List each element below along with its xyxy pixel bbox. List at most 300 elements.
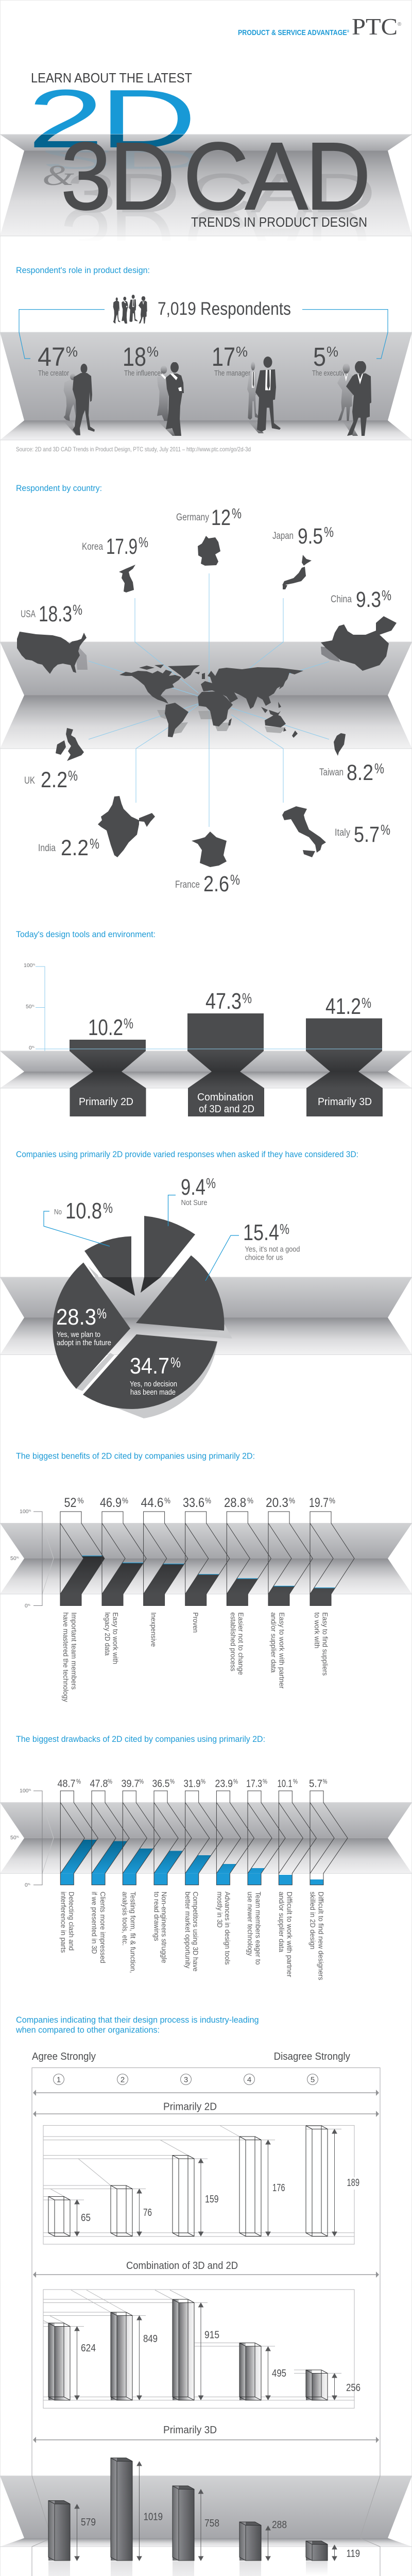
country: China: China xyxy=(331,594,352,605)
shaded bar 849 xyxy=(111,2312,158,2400)
stat: executive: 5 xyxy=(313,342,326,371)
title 3D CAD: D xyxy=(305,123,371,230)
chevron labels: if we presented in 3D xyxy=(91,1892,99,1954)
country: China xyxy=(321,587,397,671)
chevron values: % xyxy=(205,1497,211,1505)
country: Germany: % xyxy=(232,505,242,521)
chevron labels: Easy to work with xyxy=(111,1613,119,1664)
stat: creator xyxy=(38,342,78,378)
title 3D CAD: D xyxy=(110,123,175,230)
chevron values: % xyxy=(329,1497,335,1505)
chevron values: 31.9 xyxy=(183,1777,201,1789)
axis: 100 xyxy=(20,1788,29,1794)
solid bar 579 xyxy=(48,2501,96,2561)
heading: Companies using primarily 2D provide varied responses when asked if they have considered 3D: xyxy=(16,1149,358,1159)
chevron labels: analysis tools, etc. xyxy=(121,1892,129,1946)
chevron labels: and/or supplier data xyxy=(278,1892,286,1952)
country: India: % xyxy=(90,836,99,852)
chevron outlines xyxy=(60,1512,354,1605)
scale numbers: 2 xyxy=(121,2075,125,2084)
logo: PTC header: PTC xyxy=(352,13,398,40)
country: Italy xyxy=(282,806,390,857)
chevron labels: Proven xyxy=(192,1613,200,1633)
stat: creator: 47 xyxy=(38,342,65,371)
chevron values: 44.6 xyxy=(141,1496,164,1510)
section: respondent role xyxy=(0,265,412,453)
axis: % xyxy=(29,1789,31,1792)
fold band xyxy=(0,1277,412,1354)
section: drawbacks of 2D xyxy=(0,1734,412,1980)
wire bar 65: 65 xyxy=(81,2212,91,2224)
country: Germany: Germany xyxy=(176,512,209,523)
pie slice: no decision xyxy=(83,1334,217,1409)
country: Germany xyxy=(176,505,242,566)
section: benefits of 2D xyxy=(0,1451,412,1702)
chevron labels: to read drawings xyxy=(152,1892,161,1941)
stat: executive xyxy=(312,342,348,378)
solid bar 288 xyxy=(239,2519,287,2561)
axis: 0 xyxy=(25,1603,28,1609)
outer frame xyxy=(32,2068,380,2576)
logo: PTC header: ® xyxy=(398,22,402,27)
figure: manager xyxy=(247,357,281,433)
wire bar 159 xyxy=(173,2156,218,2236)
bar: combination: Combination xyxy=(197,1092,253,1103)
label: not a good choice: choice for us xyxy=(245,1254,283,1262)
chevron values: % xyxy=(76,1777,81,1785)
chevron values: % xyxy=(263,1777,267,1785)
chevron values: % xyxy=(164,1497,170,1505)
fold band xyxy=(0,1803,412,1873)
section: design tools xyxy=(0,929,412,1116)
chevron values: % xyxy=(247,1497,253,1505)
chevron labels: mostly in 3D xyxy=(216,1892,224,1928)
panel: primarily 2D bars xyxy=(43,2125,359,2244)
scale ends: Disagree Strongly xyxy=(274,2051,350,2062)
stat: manager xyxy=(212,342,250,378)
wire bar 189: 189 xyxy=(347,2177,359,2189)
bar: combination: of 3D and 2D xyxy=(199,1104,254,1115)
chevron labels xyxy=(59,1892,325,1980)
pie shadows xyxy=(76,1266,232,1418)
scale numbers: 3 xyxy=(184,2075,188,2084)
label: not a good choice: 15.4 xyxy=(243,1220,279,1245)
wire bar 176 xyxy=(239,2137,285,2236)
pie slice: no decision: % xyxy=(170,1354,181,1370)
figure: creator xyxy=(63,364,95,435)
world map xyxy=(119,665,303,738)
label: no: 10.8 xyxy=(65,1198,102,1224)
chevron outlines xyxy=(60,1791,348,1885)
solid bar 758: 758 xyxy=(204,2518,219,2529)
chevron level lines xyxy=(82,1556,335,1588)
chevron fills xyxy=(60,1556,335,1605)
chevron labels xyxy=(62,1613,330,1702)
country: USA: 18.3 xyxy=(39,602,72,626)
figure: executive xyxy=(337,361,371,436)
chevron labels: Important team members xyxy=(70,1613,78,1690)
chevron labels: Easier not to change xyxy=(237,1613,245,1675)
shaded bar 256: 256 xyxy=(346,2382,360,2394)
chevron labels: Team members eager to xyxy=(254,1892,263,1965)
country: Korea: % xyxy=(139,534,148,550)
title 3D CAD xyxy=(61,123,371,230)
bar: primarily 2D xyxy=(70,1015,146,1116)
pie slice: not sure xyxy=(141,1216,195,1293)
reflection of 3D CAD: 3 xyxy=(61,189,111,295)
reflection of 3D CAD: D xyxy=(305,189,371,295)
chevron values: % xyxy=(293,1777,298,1785)
chevron values: 36.5 xyxy=(152,1777,170,1789)
bar: primarily 3D: % xyxy=(362,995,371,1011)
label: primarily 3D: Primarily 3D xyxy=(163,2425,217,2436)
pie slice: plan to adopt: adopt in the future xyxy=(57,1339,111,1347)
stat: creator: % xyxy=(66,344,78,360)
axis: 50 xyxy=(10,1835,16,1841)
chevron labels: use newer technology xyxy=(246,1892,254,1956)
ampersand: & xyxy=(42,160,75,192)
chevron labels: Inexpensive xyxy=(149,1613,158,1647)
chevron labels: Testing form, fit & function, xyxy=(129,1892,138,1973)
section: industry leading xyxy=(0,2015,412,2576)
country: France xyxy=(175,832,240,896)
stat: influencer: The influencer xyxy=(124,369,163,378)
chevron values: 5.7 xyxy=(309,1777,322,1789)
arrow: combination xyxy=(33,2272,379,2278)
country: UK: 2.2 xyxy=(41,768,67,792)
pie slice: no decision: has been made xyxy=(130,1388,176,1397)
section: considered 3D pie xyxy=(0,1149,412,1418)
title 2D on fold: 2 xyxy=(27,73,104,165)
chevron values: 10.1 xyxy=(277,1777,293,1789)
axis xyxy=(10,1509,54,1609)
title 2D: D xyxy=(99,73,197,165)
chevron labels: Competitors using 3D have xyxy=(192,1892,200,1972)
country: Japan: 9.5 xyxy=(298,524,323,549)
title 2D on fold xyxy=(34,134,184,147)
country: USA xyxy=(17,602,88,674)
country: USA: USA xyxy=(21,609,36,620)
solid bar 1019 xyxy=(111,2458,163,2561)
chevron labels: Advances in design tools xyxy=(224,1892,232,1965)
axis: % xyxy=(16,1836,19,1839)
chevron labels: established process xyxy=(229,1613,237,1671)
heading: Respondent by country: xyxy=(16,483,102,493)
pie slice: plan to adopt: 28.3 xyxy=(56,1304,96,1330)
country: Italy: Italy xyxy=(335,827,350,838)
fold band xyxy=(0,332,412,440)
title 2D on fold: D xyxy=(99,73,197,165)
solid bar 579: 579 xyxy=(81,2517,96,2528)
logo: PTC header: PRODUCT & SERVICE ADVANTAGE xyxy=(238,28,369,37)
chevron labels: and/or supplier data xyxy=(270,1613,278,1673)
fold band xyxy=(0,642,412,749)
axis: 50 xyxy=(10,1555,16,1562)
title 2D xyxy=(27,73,197,165)
chevron labels: legacy 2D data xyxy=(104,1613,112,1656)
stat: manager: % xyxy=(236,344,248,360)
shaded bar 624 xyxy=(48,2323,96,2400)
stat: influencer xyxy=(123,342,163,378)
label: not a good choice xyxy=(243,1220,300,1262)
chevron values: % xyxy=(201,1777,205,1785)
shadow of 3D CAD: D xyxy=(115,162,180,224)
chevron values: % xyxy=(108,1777,112,1785)
chevron labels: skilled in 2D design xyxy=(309,1892,317,1950)
chevron labels: better market opportunity xyxy=(184,1892,192,1969)
solid bar 1019: 1019 xyxy=(144,2511,163,2522)
chevron values: 33.6 xyxy=(183,1496,204,1510)
label: not a good choice: % xyxy=(280,1221,289,1237)
solid bar 758 xyxy=(173,2486,219,2561)
label: no: No xyxy=(54,1208,62,1216)
bar: primarily 3D: 41.2 xyxy=(325,994,361,1019)
wire bar 159: 159 xyxy=(205,2194,218,2205)
chevron values: % xyxy=(170,1777,175,1785)
reflection of 3D CAD: A xyxy=(245,189,308,295)
scale ends: Agree Strongly xyxy=(32,2051,96,2062)
source note: Source: 2D and 3D CAD Trends in Product Design, PTC study, July 2011 – http://www.ptc.com/go/2d-3d xyxy=(16,446,251,453)
pie slice: no decision: 34.7 xyxy=(130,1353,169,1379)
stat: manager: The manager xyxy=(214,369,250,378)
pie slice: plan to adopt: Yes, we plan to xyxy=(57,1331,100,1339)
panel: primarily 3D bars xyxy=(48,2458,360,2576)
reflection of 3D CAD: D xyxy=(110,189,175,295)
chevron labels: interference in parts xyxy=(59,1892,67,1953)
chevron values: % xyxy=(77,1497,83,1505)
bar: primarily 3D: Primarily 3D xyxy=(318,1096,372,1108)
chevron labels: Clients more impressed xyxy=(99,1892,107,1963)
wire bar 76 xyxy=(111,2185,152,2236)
country: Taiwan: Taiwan xyxy=(319,767,344,778)
axis: % xyxy=(28,1604,30,1607)
country: Italy: 5.7 xyxy=(354,822,380,847)
heading: Today's design tools and environment: xyxy=(16,929,156,939)
heading: Respondent's role in product design: xyxy=(16,265,150,275)
chevron values: 20.3 xyxy=(266,1496,288,1510)
bar: primarily 2D: Primarily 2D xyxy=(79,1096,133,1108)
chevron values: 47.8 xyxy=(90,1777,108,1789)
title 3D CAD: C xyxy=(183,123,249,230)
callout lines xyxy=(44,1195,239,1281)
chevron values: 48.7 xyxy=(58,1777,75,1789)
scale ends xyxy=(32,2051,350,2062)
chevron labels: to work with xyxy=(313,1613,321,1649)
heading: learn about the latest: LEARN ABOUT THE LATEST xyxy=(31,70,192,86)
fold band: title xyxy=(0,134,412,236)
respondent total: 7,019 Respondents xyxy=(158,299,291,319)
bracket xyxy=(19,310,388,359)
heading: when compared to other organizations: xyxy=(15,2025,160,2035)
country: France: France xyxy=(175,879,200,890)
chevron values: 23.9 xyxy=(215,1777,233,1789)
chevron fills xyxy=(60,1840,265,1873)
shadow of 3D CAD: D xyxy=(311,162,376,224)
scale numbers: 4 xyxy=(247,2075,251,2084)
country: Taiwan: 8.2 xyxy=(347,760,373,785)
label: no: % xyxy=(103,1200,113,1216)
world map floor shadow xyxy=(157,710,286,734)
solid bar 288: 288 xyxy=(272,2519,287,2531)
axis: % xyxy=(32,1005,35,1008)
country: Japan: % xyxy=(324,524,334,540)
country: France: % xyxy=(230,872,240,888)
chevron values: 28.8 xyxy=(224,1496,246,1510)
arrow: primarily 2D xyxy=(33,2111,379,2117)
connector lines xyxy=(89,573,329,827)
shadow of 3D CAD: A xyxy=(250,162,314,224)
bar: combination: % xyxy=(242,990,252,1006)
label: combination: Combination of 3D and 2D xyxy=(126,2260,238,2272)
axis: % xyxy=(33,963,36,967)
stat: influencer: % xyxy=(147,344,159,360)
chevron values: % xyxy=(289,1497,295,1505)
country: Taiwan: % xyxy=(374,760,384,776)
arrow: primarily 3D xyxy=(33,2437,379,2443)
pie slice: plan to adopt xyxy=(53,1262,130,1389)
shaded bar 495 xyxy=(239,2343,287,2400)
country: Italy: % xyxy=(381,822,390,838)
country: Japan: Japan xyxy=(272,531,294,541)
reflections xyxy=(48,2561,328,2576)
shadow of 3D CAD: 2 xyxy=(39,145,115,174)
fold band xyxy=(0,1523,412,1594)
section: respondent by country xyxy=(0,483,412,896)
axis: % xyxy=(28,1883,30,1886)
axis: 100 xyxy=(20,1509,29,1515)
stat: influencer: 18 xyxy=(123,342,146,371)
chevron values: 52 xyxy=(64,1496,76,1510)
country: Germany: 12 xyxy=(211,505,231,530)
stat: creator: The creator xyxy=(38,369,69,378)
country: India: 2.2 xyxy=(61,836,89,860)
label: not a good choice: Yes, it's not a good xyxy=(245,1246,300,1254)
label: not sure xyxy=(181,1175,216,1207)
shadow of 3D CAD: 3 xyxy=(66,162,116,224)
wire bar 176: 176 xyxy=(272,2182,285,2194)
shadow of 3D CAD: D xyxy=(111,145,208,174)
country: China: % xyxy=(382,587,391,603)
country: India xyxy=(38,796,155,860)
logo: PTC header xyxy=(238,13,402,40)
fold band xyxy=(0,2476,412,2547)
country: Korea: 17.9 xyxy=(106,534,138,559)
shaded bar 849: 849 xyxy=(143,2333,158,2345)
pie slice: not a good choice xyxy=(136,1256,224,1331)
solid bar 119: 119 xyxy=(346,2548,360,2560)
pie slice: no decision: Yes, no decision xyxy=(130,1380,177,1388)
axis: 0 xyxy=(25,1882,28,1888)
arrow: scale xyxy=(33,2090,379,2096)
panel: combination bars xyxy=(43,2290,360,2408)
chevron values: % xyxy=(322,1777,328,1785)
country: China: 9.3 xyxy=(356,587,381,612)
country: Japan xyxy=(272,524,334,589)
chevron labels: Detecting clash and xyxy=(67,1892,76,1951)
reflection of 3D CAD: C xyxy=(183,189,249,295)
shaded bar 915 xyxy=(173,2299,219,2400)
bar: primarily 2D: 10.2 xyxy=(88,1015,123,1040)
chevron labels: Easy to work with partner xyxy=(278,1613,286,1689)
chevron values: % xyxy=(122,1497,128,1505)
chevron values xyxy=(64,1496,335,1510)
logo: PTC header: ® xyxy=(347,29,350,33)
label: primarily 2D: Primarily 2D xyxy=(163,2101,217,2112)
country: UK: UK xyxy=(24,775,35,786)
bar: primarily 2D: % xyxy=(124,1015,133,1031)
wire bar 189 xyxy=(306,2126,359,2236)
stat: executive: % xyxy=(327,344,338,360)
chevron bases xyxy=(60,1873,323,1885)
shaded bar 256 xyxy=(306,2370,360,2400)
chevron values: 46.9 xyxy=(100,1496,122,1510)
chevron labels: Difficult to find new designers xyxy=(317,1892,325,1980)
axis xyxy=(10,1788,54,1888)
heading: The biggest drawbacks of 2D cited by companies using primarily 2D: xyxy=(16,1734,265,1744)
pie slice: no xyxy=(84,1236,135,1296)
country: Taiwan xyxy=(319,733,384,785)
axis: 100 xyxy=(24,962,33,969)
label: not sure: % xyxy=(206,1175,216,1191)
country: Korea: Korea xyxy=(82,541,103,552)
figure: influencer xyxy=(157,362,184,436)
label: not sure: 9.4 xyxy=(181,1175,205,1200)
axis: 0 xyxy=(29,1045,32,1051)
wire bar 65 xyxy=(48,2197,91,2236)
title 2D: 2 xyxy=(27,73,104,165)
country: UK: % xyxy=(68,768,78,784)
country: UK xyxy=(24,728,84,792)
scale numbers: 5 xyxy=(311,2075,315,2084)
reflection of 3D CAD xyxy=(64,210,364,229)
country: India: India xyxy=(38,843,56,854)
bar: primarily 3D xyxy=(306,994,383,1116)
axis xyxy=(24,962,382,1051)
shadow of 3D CAD: C xyxy=(188,162,254,224)
label: not sure: Not Sure xyxy=(181,1199,207,1207)
chevron values: 19.7 xyxy=(309,1496,329,1510)
shadow of 3D CAD xyxy=(45,150,372,213)
chevron values: 39.7 xyxy=(122,1777,139,1789)
country: Korea xyxy=(82,534,148,592)
chevron values: % xyxy=(233,1777,238,1785)
wire bar 76: 76 xyxy=(143,2207,152,2218)
scale numbers: 1 xyxy=(57,2075,61,2084)
axis: % xyxy=(16,1556,19,1560)
fold band xyxy=(0,1051,412,1088)
stat: executive: The executive xyxy=(312,369,348,378)
chevron labels: Non-engineers struggle xyxy=(160,1892,168,1963)
axis: % xyxy=(29,1510,31,1513)
chevron labels: have mastered the technology xyxy=(62,1613,70,1702)
icon: people group xyxy=(113,295,147,324)
heading: trends: TRENDS IN PRODUCT DESIGN xyxy=(191,214,367,230)
shaded bar 915: 915 xyxy=(204,2330,219,2341)
heading: Companies indicating that their design process is industry-leading xyxy=(16,2015,259,2025)
title 3D CAD: A xyxy=(245,123,308,230)
solid bar 119 xyxy=(306,2541,360,2561)
title 3D CAD: 3 xyxy=(61,123,111,230)
chevron values: 17.3 xyxy=(246,1777,262,1789)
stat: manager: 17 xyxy=(212,342,235,371)
axis: 50 xyxy=(26,1004,32,1010)
shaded bar 624: 624 xyxy=(81,2343,96,2354)
pie slice: plan to adopt: % xyxy=(97,1306,107,1321)
chevron values xyxy=(58,1777,328,1789)
bar: combination: 47.3 xyxy=(205,989,242,1014)
heading xyxy=(15,2015,259,2035)
chevron values: % xyxy=(139,1777,144,1785)
